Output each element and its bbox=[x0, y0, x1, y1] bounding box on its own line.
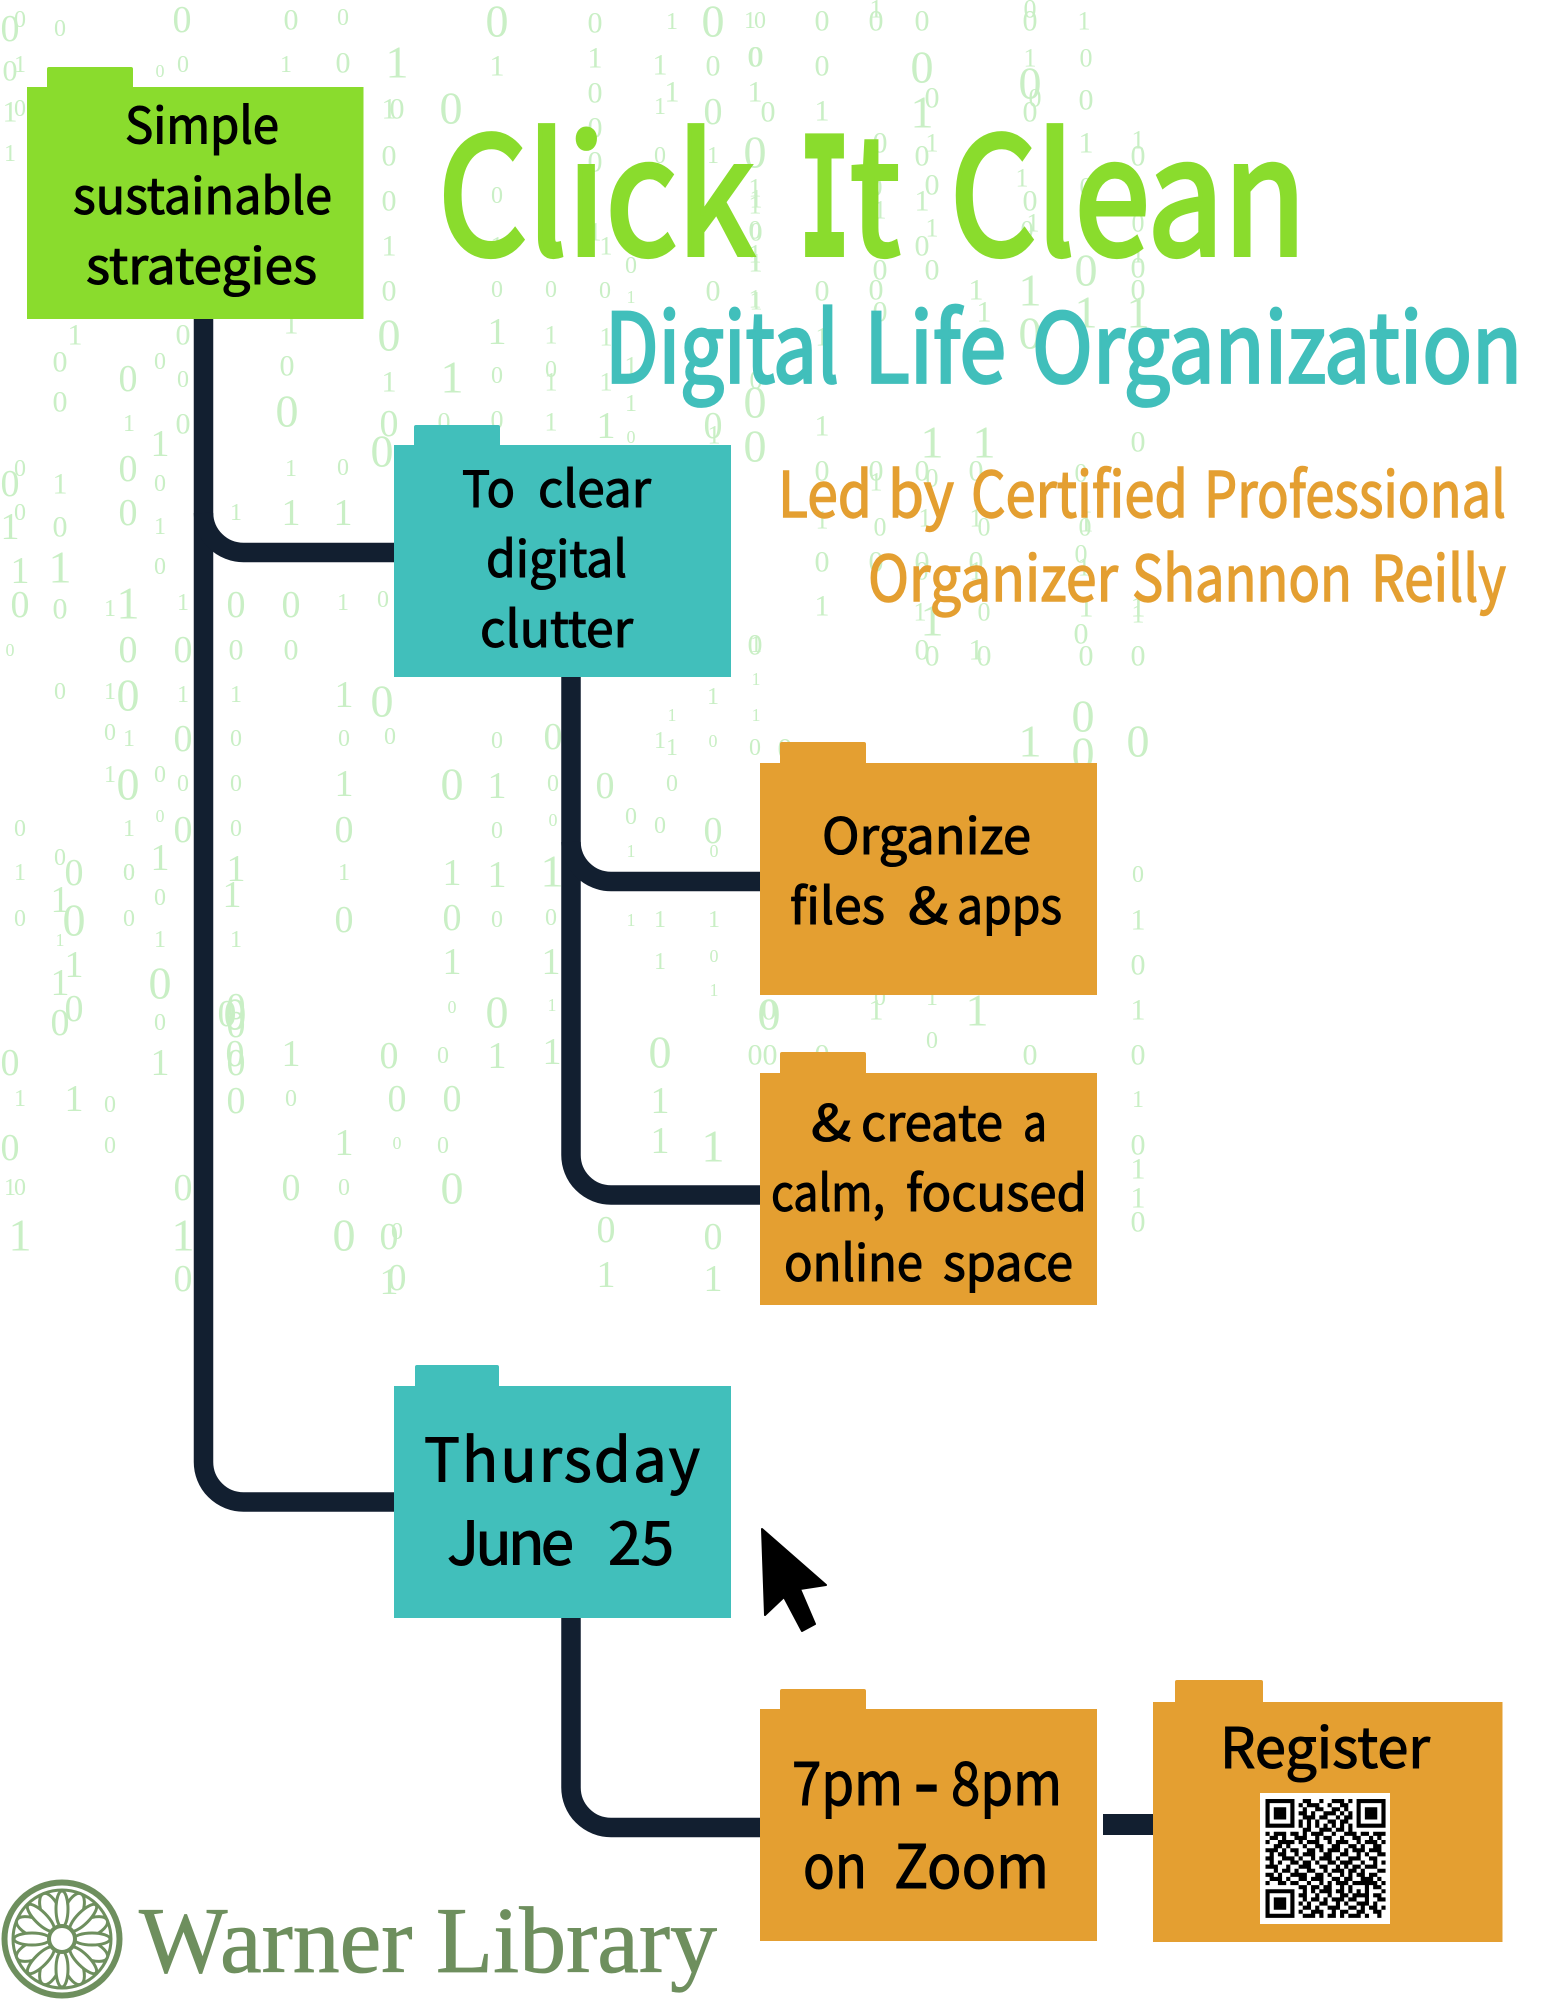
panel: organize files and apps folder: Organize bbox=[822, 797, 1031, 869]
panel: organize files and apps folder bbox=[760, 742, 1097, 995]
panel: thursday june 25 folder: June bbox=[447, 1496, 574, 1582]
panel: register folder with QR code bbox=[1153, 1680, 1502, 1942]
title: Click It Clean bbox=[438, 66, 1306, 310]
background: binary digit rain: 000001101100001000011000100100111001110010100 bbox=[8, 0, 1150, 1260]
panel: to clear digital clutter folder: To bbox=[462, 450, 515, 522]
title: Click It Clean: I bbox=[800, 106, 849, 310]
panel: calm focused online space folder: & bbox=[811, 1084, 851, 1156]
panel: 7pm to 8pm on zoom folder: 8pm bbox=[951, 1736, 1062, 1823]
panel: thursday june 25 folder: 25 bbox=[608, 1496, 674, 1582]
background: binary digit rain: 00010111001101000000010010100011010111011110100011001000000000010101000000111110010000100001001 bbox=[4, 5, 1144, 1245]
panel: organize files and apps folder: files bbox=[790, 867, 885, 939]
panel: calm focused online space folder: online bbox=[784, 1224, 923, 1296]
panel: organize files and apps folder: apps bbox=[957, 867, 1062, 939]
background: binary digit rain: 00100110000001100001100101100001111001011000110100000110100000111000110111 bbox=[0, 0, 722, 1303]
panel: calm focused online space folder: focused bbox=[906, 1154, 1087, 1226]
presenter text: Reilly bbox=[1371, 529, 1506, 620]
icon: QR code bbox=[1260, 1793, 1390, 1924]
presenter text: Shannon bbox=[1132, 529, 1352, 620]
panel: 7pm to 8pm on zoom folder: Zoom bbox=[894, 1819, 1049, 1906]
panel: thursday june 25 folder bbox=[394, 1365, 731, 1618]
background: binary digit rain: 000011100110010000100001011000000100000011000010010000000000101100100000001000100011010100110000010000 bbox=[2, 4, 1146, 1272]
panel: calm focused online space folder: space bbox=[943, 1224, 1073, 1296]
heading: register: Register bbox=[1220, 1704, 1430, 1785]
panel: to clear digital clutter folder: clear bbox=[538, 450, 652, 522]
icon: rosette bbox=[4, 1882, 120, 1996]
background: binary digit rain: 1010101010111110111010110111100010010101111111100111111010 bbox=[438, 0, 1144, 628]
panel: calm focused online space folder: calm, bbox=[771, 1154, 885, 1226]
panel: to clear digital clutter folder bbox=[394, 425, 731, 677]
panel: to clear digital clutter folder: clutter bbox=[480, 590, 634, 662]
panel: calm focused online space folder bbox=[760, 1052, 1097, 1305]
presenter text: Certified bbox=[971, 445, 1188, 536]
panel: 7pm to 8pm on zoom folder: 7pm bbox=[792, 1736, 903, 1823]
presenter text bbox=[778, 445, 1506, 620]
panel: calm focused online space folder: create bbox=[861, 1084, 1003, 1156]
subtitle: Digital Life Organization: Life bbox=[864, 272, 1006, 410]
title: Click It Clean: Click bbox=[438, 66, 754, 302]
panel: 7pm to 8pm on zoom folder: - bbox=[915, 1736, 938, 1823]
connector lines bbox=[204, 319, 1153, 1828]
presenter text: by bbox=[888, 445, 954, 536]
panel: 7pm to 8pm on zoom folder: on bbox=[803, 1819, 867, 1906]
panel: simple sustainable strategies folder bbox=[27, 67, 364, 319]
presenter text: Organizer bbox=[868, 529, 1118, 620]
panel: to clear digital clutter folder: digital bbox=[486, 520, 627, 592]
panel: thursday june 25 folder: Thursday bbox=[424, 1412, 700, 1500]
panel: calm focused online space folder: a bbox=[1023, 1084, 1047, 1156]
panel: 7pm to 8pm on zoom folder bbox=[760, 1689, 1097, 1941]
logo: Warner Library bbox=[4, 1882, 717, 1996]
panel: simple sustainable strategies folder: sustainable bbox=[73, 157, 332, 229]
icon: mouse cursor arrow bbox=[762, 1529, 826, 1631]
panel: organize files and apps folder: & bbox=[908, 867, 948, 939]
panel: simple sustainable strategies folder: strategies bbox=[86, 227, 317, 299]
subtitle: Digital Life Organization: Digital bbox=[605, 272, 839, 410]
wordmark: Warner Library bbox=[139, 1889, 717, 1993]
background: binary digit rain: 0010011100101010110 bbox=[6, 61, 760, 1153]
panel: simple sustainable strategies folder: Simple bbox=[125, 86, 279, 158]
presenter text: Led bbox=[778, 445, 872, 536]
subtitle: Digital Life Organization bbox=[605, 272, 1522, 410]
title: Click It Clean: Clean bbox=[950, 66, 1306, 302]
title: Click It Clean: t bbox=[850, 66, 900, 302]
